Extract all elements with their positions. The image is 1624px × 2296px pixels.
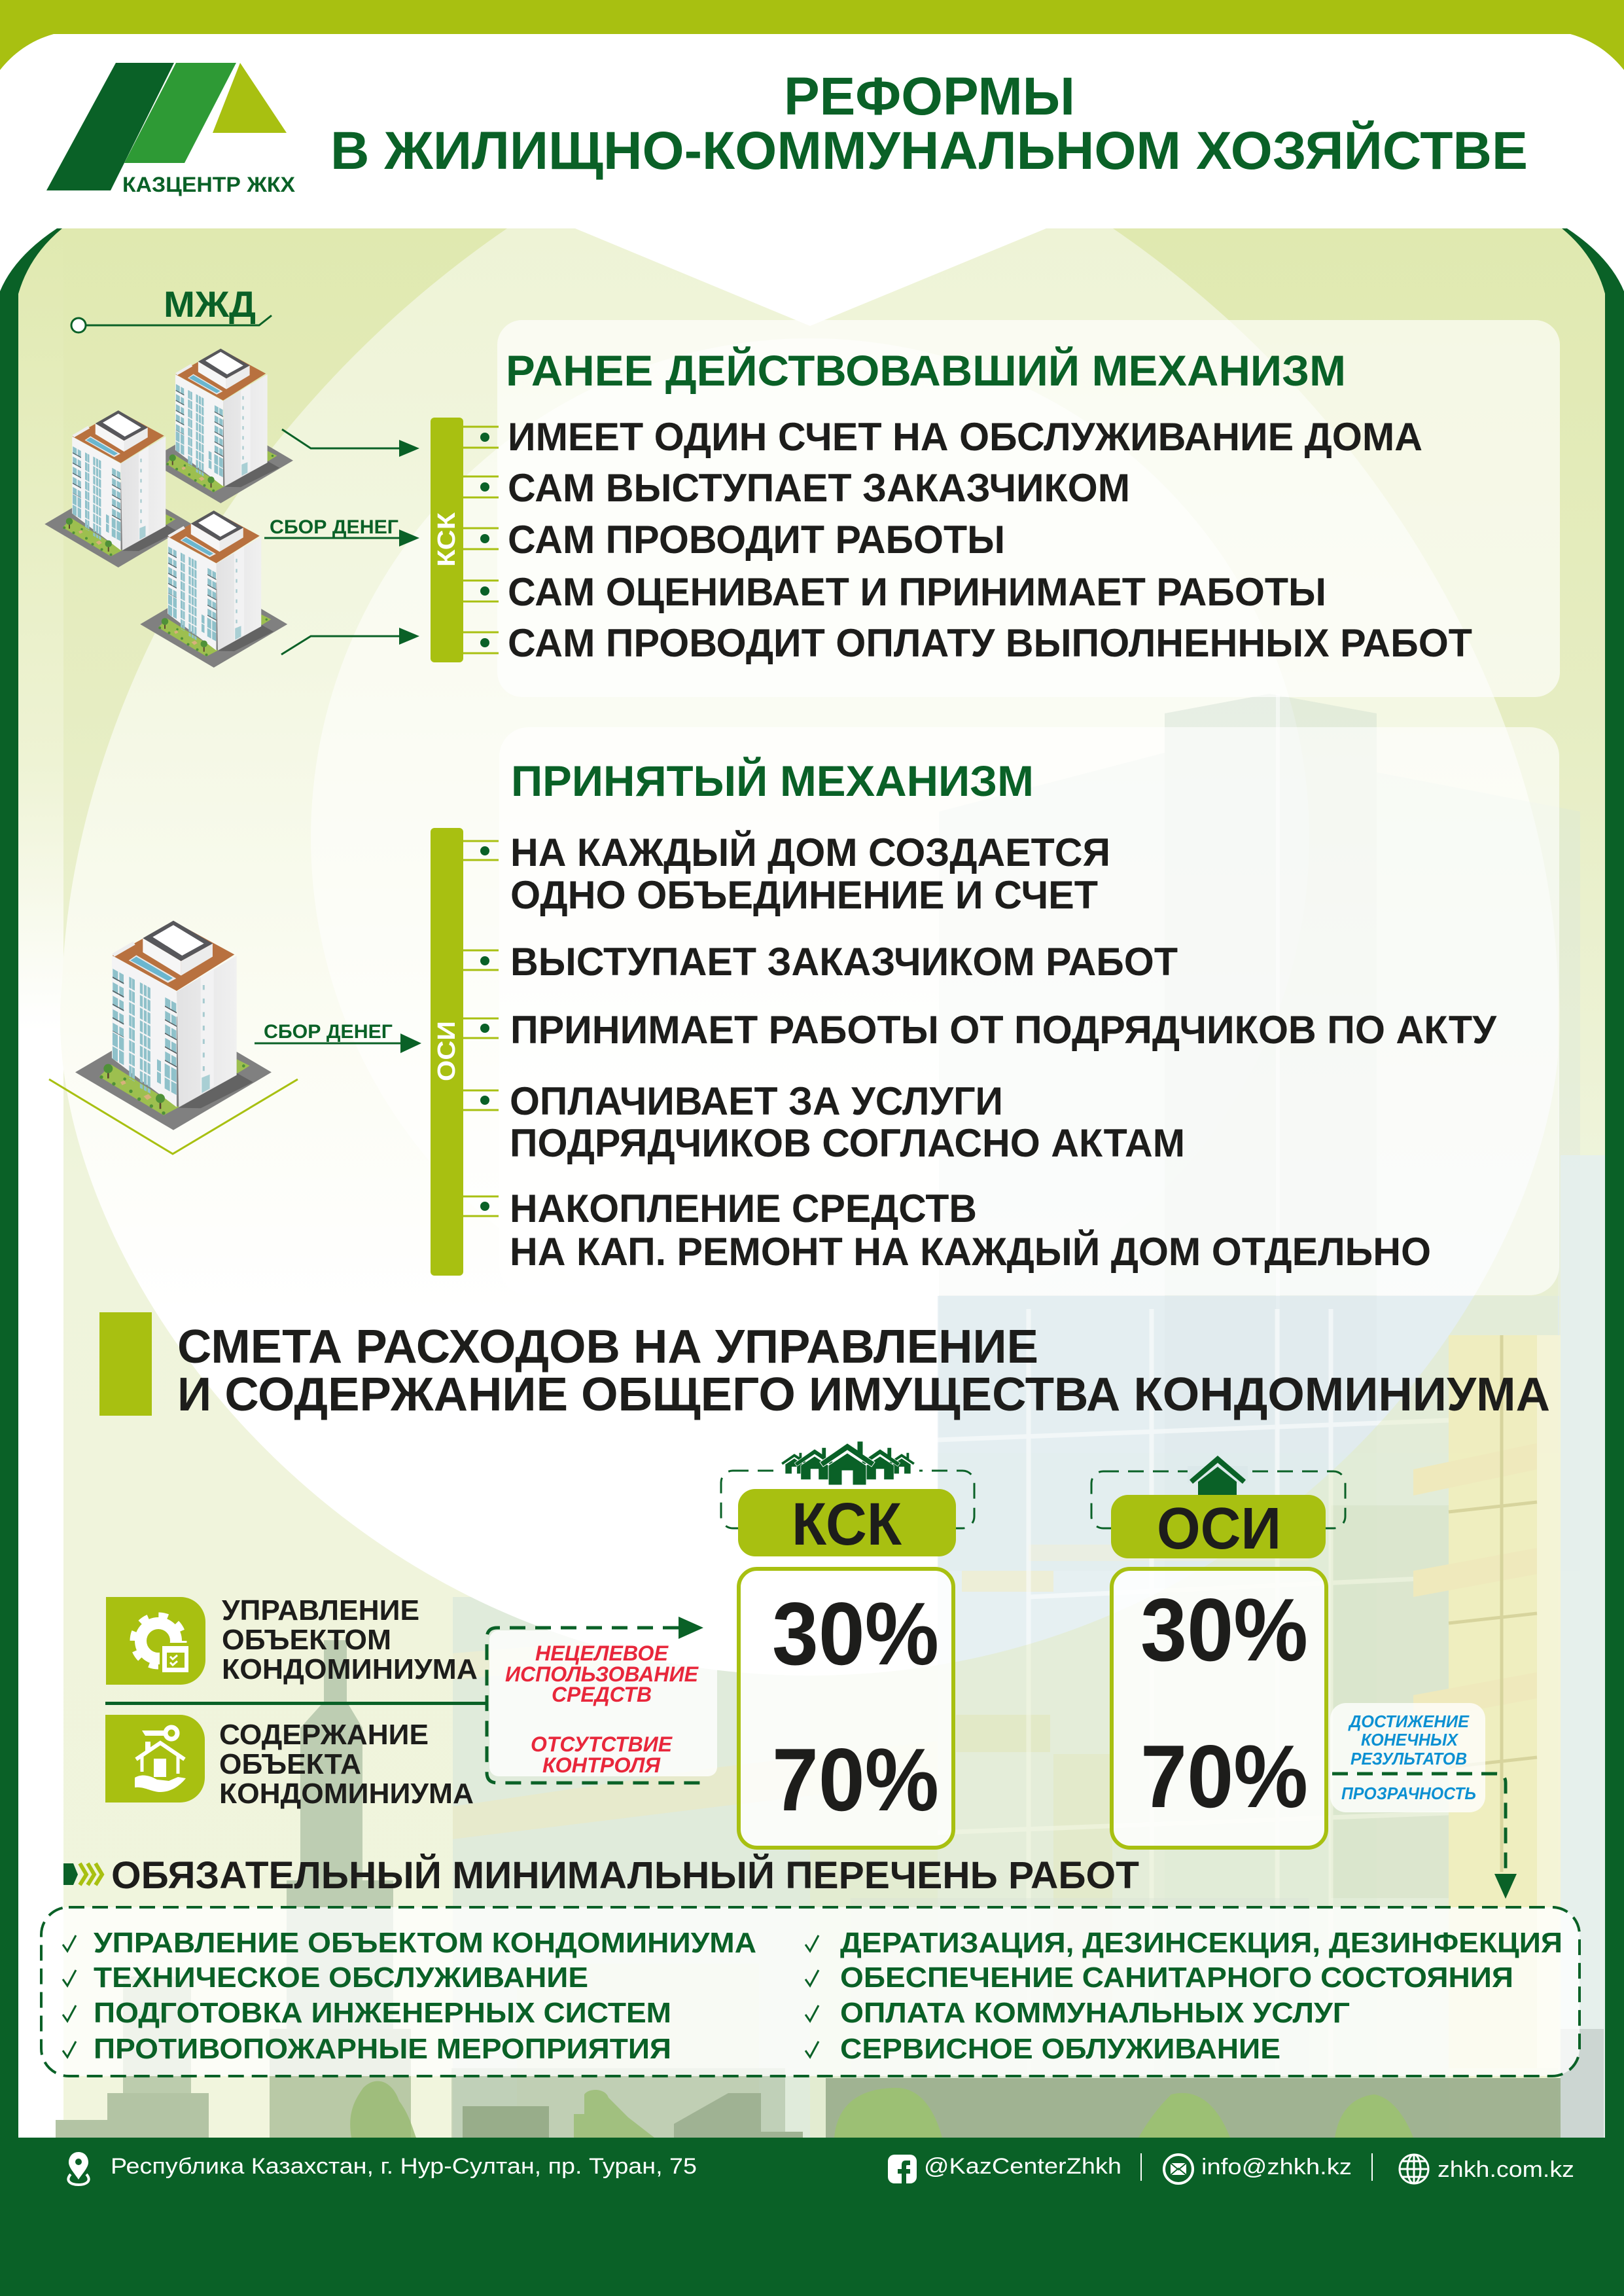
footer: info@zhkh.kz bbox=[1201, 2155, 1352, 2179]
column: КСК: 70% bbox=[772, 1730, 939, 1829]
callout: КСК problems: КОНТРОЛЯ bbox=[542, 1753, 661, 1777]
footer: Республика Казахстан, г. Нур-Султан, пр. Туран, 75 bbox=[111, 2154, 697, 2179]
heading: budget section bbox=[99, 1312, 1550, 1421]
bar: ОСИ with bullets: ОСИ bbox=[433, 1021, 461, 1081]
list: previous mechanism items: САМ ВЫСТУПАЕТ ЗАКАЗЧИКОМ bbox=[508, 466, 1130, 510]
row: condominium management: КОНДОМИНИУМА bbox=[222, 1653, 478, 1685]
list: adopted mechanism items: ОПЛАЧИВАЕТ ЗА УСЛУГИ bbox=[510, 1079, 1003, 1123]
heading: budget section: СМЕТА РАСХОДОВ НА УПРАВЛЕНИЕ bbox=[177, 1321, 1038, 1373]
checkmarks bbox=[63, 1935, 819, 2057]
callout: КСК problems: СРЕДСТВ bbox=[552, 1683, 652, 1706]
row: condominium maintenance: ОБЪЕКТА bbox=[219, 1748, 361, 1780]
list: adopted mechanism items: НАКОПЛЕНИЕ СРЕДСТВ bbox=[510, 1187, 977, 1230]
list: left column: ПОДГОТОВКА ИНЖЕНЕРНЫХ СИСТЕМ bbox=[94, 1997, 671, 2029]
label: МЖД bbox=[71, 283, 272, 332]
callout: ОСИ benefits: КОНЕЧНЫХ bbox=[1361, 1730, 1459, 1749]
list: adopted mechanism items bbox=[510, 831, 1497, 1274]
footer: zhkh.com.kz bbox=[1438, 2157, 1574, 2182]
icon: facebook bbox=[888, 2155, 917, 2183]
list: left column: УПРАВЛЕНИЕ ОБЪЕКТОМ КОНДОМИНИУМА bbox=[94, 1927, 756, 1959]
icon: globe bbox=[1400, 2155, 1428, 2183]
row: condominium management: УПРАВЛЕНИЕ bbox=[222, 1594, 419, 1626]
title: В ЖИЛИЩНО-КОММУНАЛЬНОМ ХОЗЯЙСТВЕ bbox=[330, 120, 1528, 181]
footer: @KazCenterZhkh bbox=[924, 2154, 1121, 2179]
heading: adopted mechanism: ПРИНЯТЫЙ МЕХАНИЗМ bbox=[511, 756, 1034, 805]
callout: КСК problems: ИСПОЛЬЗОВАНИЕ bbox=[505, 1662, 699, 1686]
list: previous mechanism items: САМ ПРОВОДИТ РАБОТЫ bbox=[508, 518, 1005, 562]
column: КСК: КСК bbox=[792, 1491, 902, 1558]
icon: single apartment building bbox=[49, 921, 298, 1154]
title bbox=[330, 67, 1528, 181]
list: previous mechanism items: САМ ОЦЕНИВАЕТ И ПРИНИМАЕТ РАБОТЫ bbox=[508, 570, 1326, 614]
callout: КСК problems bbox=[487, 1617, 717, 1783]
list: adopted mechanism items: ОДНО ОБЪЕДИНЕНИЕ И СЧЕТ bbox=[510, 873, 1098, 917]
list: right column: ДЕРАТИЗАЦИЯ, ДЕЗИНСЕКЦИЯ, ДЕЗИНФЕКЦИЯ bbox=[840, 1927, 1562, 1959]
list: left column bbox=[94, 1927, 756, 2065]
list: left column: ПРОТИВОПОЖАРНЫЕ МЕРОПРИЯТИЯ bbox=[94, 2033, 671, 2065]
list: right column: ОПЛАТА КОММУНАЛЬНЫХ УСЛУГ bbox=[840, 1997, 1350, 2029]
callout: КСК problems: ОТСУТСТВИЕ bbox=[531, 1732, 673, 1756]
heading: previous mechanism: РАНЕЕ ДЕЙСТВОВАВШИЙ МЕХАНИЗМ bbox=[506, 346, 1346, 395]
list: adopted mechanism items: ВЫСТУПАЕТ ЗАКАЗЧИКОМ РАБОТ bbox=[510, 940, 1178, 984]
callout: КСК problems: НЕЦЕЛЕВОЕ bbox=[535, 1641, 669, 1665]
column: КСК bbox=[721, 1441, 974, 1848]
title: РЕФОРМЫ bbox=[784, 67, 1075, 126]
heading: mandatory minimum works: ОБЯЗАТЕЛЬНЫЙ МИНИМАЛЬНЫЙ ПЕРЕЧЕНЬ РАБОТ bbox=[111, 1854, 1139, 1897]
list: previous mechanism items bbox=[508, 415, 1472, 665]
column: ОСИ: 30% bbox=[1140, 1580, 1308, 1679]
divider line between rows bbox=[105, 1702, 488, 1705]
list: adopted mechanism items: НА КАЖДЫЙ ДОМ СОЗДАЕТСЯ bbox=[510, 831, 1110, 874]
list: right column: СЕРВИСНОЕ ОБЛУЖИВАНИЕ bbox=[840, 2033, 1280, 2065]
column: ОСИ: 70% bbox=[1140, 1727, 1308, 1826]
list: adopted mechanism items: ПРИНИМАЕТ РАБОТЫ ОТ ПОДРЯДЧИКОВ ПО АКТУ bbox=[510, 1008, 1497, 1052]
list: previous mechanism items: САМ ПРОВОДИТ ОПЛАТУ ВЫПОЛНЕННЫХ РАБОТ bbox=[508, 621, 1472, 665]
column: ОСИ: ОСИ bbox=[1157, 1496, 1281, 1562]
heading: budget section: И СОДЕРЖАНИЕ ОБЩЕГО ИМУЩЕСТВА КОНДОМИНИУМА bbox=[177, 1369, 1550, 1421]
bar: ОСИ with bullets bbox=[431, 828, 499, 1276]
callout: ОСИ benefits: ПРОЗРАЧНОСТЬ bbox=[1341, 1784, 1476, 1803]
row: condominium management: ОБЪЕКТОМ bbox=[222, 1624, 391, 1656]
icon: email bbox=[1164, 2155, 1193, 2183]
callout: ОСИ benefits bbox=[1330, 1703, 1517, 1899]
panel: adopted mechanism bbox=[499, 727, 1559, 1295]
list: previous mechanism items: ИМЕЕТ ОДИН СЧЕТ НА ОБСЛУЖИВАНИЕ ДОМА bbox=[508, 415, 1422, 459]
icon: location pin bbox=[68, 2152, 89, 2185]
icon: single house bbox=[1188, 1456, 1248, 1499]
arrows: money collection to КСК: СБОР ДЕНЕГ bbox=[270, 516, 398, 538]
column: ОСИ bbox=[1091, 1456, 1345, 1848]
row: condominium maintenance: КОНДОМИНИУМА bbox=[219, 1778, 474, 1810]
footer bbox=[0, 2138, 1624, 2296]
list: right column bbox=[840, 1927, 1562, 2065]
row: condominium management bbox=[106, 1594, 478, 1685]
callout: ОСИ benefits: РЕЗУЛЬТАТОВ bbox=[1350, 1749, 1467, 1768]
label: МЖД: МЖД bbox=[164, 283, 256, 325]
list: adopted mechanism items: ПОДРЯДЧИКОВ СОГЛАСНО АКТАМ bbox=[510, 1121, 1185, 1165]
footer dividers bbox=[1141, 2153, 1372, 2181]
logo: КАЗЦЕНТР ЖКХ bbox=[122, 173, 296, 196]
icon: three apartment buildings bbox=[44, 349, 293, 668]
panel: mandatory works list bbox=[41, 1907, 1580, 2076]
row: condominium maintenance: СОДЕРЖАНИЕ bbox=[219, 1719, 429, 1751]
bar: КСК with bullets: КСК bbox=[433, 512, 461, 567]
arrows: money collection to КСК bbox=[264, 429, 419, 655]
icon: house with key and hand bbox=[105, 1715, 205, 1803]
row: condominium maintenance bbox=[105, 1715, 474, 1810]
background illustration: city buildings bbox=[287, 694, 1605, 2138]
bar: КСК with bullets bbox=[431, 418, 499, 662]
icon: gear with checklist bbox=[106, 1597, 205, 1685]
background illustration: skyline at the bottom bbox=[56, 1977, 1604, 2138]
logo bbox=[46, 63, 296, 196]
column: КСК: 30% bbox=[772, 1584, 939, 1683]
list: left column: ТЕХНИЧЕСКОЕ ОБСЛУЖИВАНИЕ bbox=[94, 1962, 588, 1994]
background: tinted field, lower buildings and light disc bbox=[60, 228, 1605, 2138]
list: adopted mechanism items: НА КАП. РЕМОНТ НА КАЖДЫЙ ДОМ ОТДЕЛЬНО bbox=[510, 1230, 1431, 1274]
arrow: money collection to ОСИ bbox=[255, 1021, 421, 1053]
callout: ОСИ benefits: ДОСТИЖЕНИЕ bbox=[1348, 1712, 1470, 1731]
panel: previous mechanism bbox=[497, 320, 1560, 697]
arrow: money collection to ОСИ: СБОР ДЕНЕГ bbox=[264, 1021, 393, 1043]
icon: group of houses bbox=[781, 1441, 915, 1485]
list: right column: ОБЕСПЕЧЕНИЕ САНИТАРНОГО СОСТОЯНИЯ bbox=[840, 1962, 1513, 1994]
